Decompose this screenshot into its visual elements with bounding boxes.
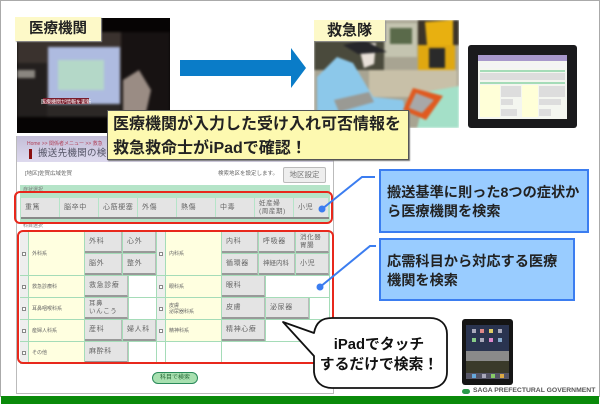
screen header: 搬送先機関の検索	[38, 148, 116, 159]
symptom band: 心筋梗塞	[103, 204, 133, 210]
symptom band: 熱傷	[181, 204, 196, 210]
department table: いんこう	[89, 308, 117, 314]
department table: 耳鼻咽喉科系	[32, 306, 62, 312]
label: hospital	[15, 17, 101, 41]
symptom band: 外傷	[142, 204, 157, 210]
department table: 消化器	[300, 234, 321, 240]
breadcrumb: Home >> 関係者メニュー >> 救急	[27, 141, 103, 147]
department table: 神経内科	[263, 260, 289, 266]
department label: 科目選択	[23, 223, 43, 229]
department table: 眼科	[226, 282, 241, 288]
connector lines	[316, 176, 376, 290]
callout: main message: 医療機関が入力した受け入れ可否情報を	[113, 116, 401, 133]
department table: 産婦人科系	[32, 328, 57, 334]
symptom band: 小児	[298, 204, 313, 210]
department table	[20, 231, 330, 364]
department table: 内科	[226, 238, 241, 244]
department table: 婦人科	[127, 326, 150, 332]
department table: 眼科系	[169, 284, 184, 290]
department table: 脳外	[89, 260, 104, 266]
department table: 内科系	[169, 250, 184, 256]
symptom band: 中毒	[220, 204, 235, 210]
label: ambulance crew: 救急隊	[327, 22, 372, 39]
department table: 外科	[89, 238, 104, 244]
symptom buttons: 重篤	[25, 204, 40, 210]
arrow: hospital to ambulance	[180, 48, 306, 88]
department table: 外科系	[32, 250, 47, 256]
department table: 麻酔科	[89, 348, 112, 354]
label: hospital: 医療機関	[29, 21, 87, 37]
department table: 皮膚	[226, 304, 241, 310]
callout: main message: 救急救命士がiPadで確認！	[113, 140, 307, 157]
department table: 小児	[300, 260, 315, 266]
department table: 精神科系	[169, 328, 189, 334]
info box: department search: 機関を検索	[387, 272, 458, 288]
photo: paramedic with iPad	[314, 20, 459, 128]
department table: 耳鼻	[89, 300, 103, 306]
search button: 科目で検索	[160, 375, 190, 381]
department table: 循環器	[226, 260, 249, 266]
title mark	[29, 149, 32, 159]
red highlight: symptoms	[14, 191, 333, 224]
department table: 心外	[127, 238, 142, 244]
symptom band: 妊産婦	[259, 200, 280, 206]
symptom band: (周産期)	[259, 208, 286, 214]
department table: 産科	[89, 326, 104, 332]
info box: department search	[379, 238, 575, 301]
info box: symptoms search: ら医療機関を検索	[387, 204, 501, 220]
panel: search screen	[16, 136, 334, 394]
speech bubble: touch to search: iPadでタッチ	[334, 336, 424, 353]
search button	[152, 372, 198, 384]
region text: [地区]佐賀広域佐賀	[25, 171, 72, 177]
callout: main message	[107, 110, 409, 160]
label: ambulance crew	[314, 20, 385, 41]
icon: landscape iPad with search screen	[468, 45, 577, 128]
red highlight: departments	[17, 230, 334, 364]
department table: 皮膚	[169, 302, 179, 308]
department table: その他	[32, 350, 47, 356]
info box: symptoms search: 搬送基準に則った8つの症状か	[387, 185, 579, 201]
symptom label: 症状選択	[23, 187, 43, 193]
department table: 救急診療	[89, 282, 119, 288]
footer bar	[1, 396, 599, 404]
symptom band	[20, 185, 330, 223]
department table: 精神心療	[226, 326, 256, 332]
speech bubble: touch to search: するだけで検索！	[320, 356, 438, 373]
logo text: SAGA PREFECTURAL GOVERNMENT	[473, 387, 595, 394]
info box: symptoms search	[379, 169, 589, 233]
department table: 救急診療科	[32, 284, 57, 290]
symptom buttons	[21, 198, 59, 217]
logo mark	[462, 389, 470, 394]
grey rule	[21, 217, 329, 219]
department table: 整外	[127, 260, 142, 266]
region button	[283, 167, 326, 183]
department table: 泌尿器科系	[169, 308, 194, 314]
department table: 呼吸器	[263, 238, 286, 244]
region note: 検索地区を設定します。	[218, 171, 278, 177]
icon: portrait iPad	[462, 319, 513, 385]
speech bubble: touch to search	[282, 317, 448, 389]
department table: 胃腸	[300, 242, 314, 248]
info box: department search: 応需科目から対応する医療	[387, 254, 557, 270]
department table: 泌尿器	[270, 304, 293, 310]
photo: hospital staff at monitor: 医療機関が情報を更新	[41, 98, 91, 106]
photo: hospital staff at monitor	[17, 18, 170, 133]
region button: 地区設定	[290, 170, 320, 179]
symptom band: 脳卒中	[64, 204, 87, 210]
screen header	[17, 136, 333, 162]
